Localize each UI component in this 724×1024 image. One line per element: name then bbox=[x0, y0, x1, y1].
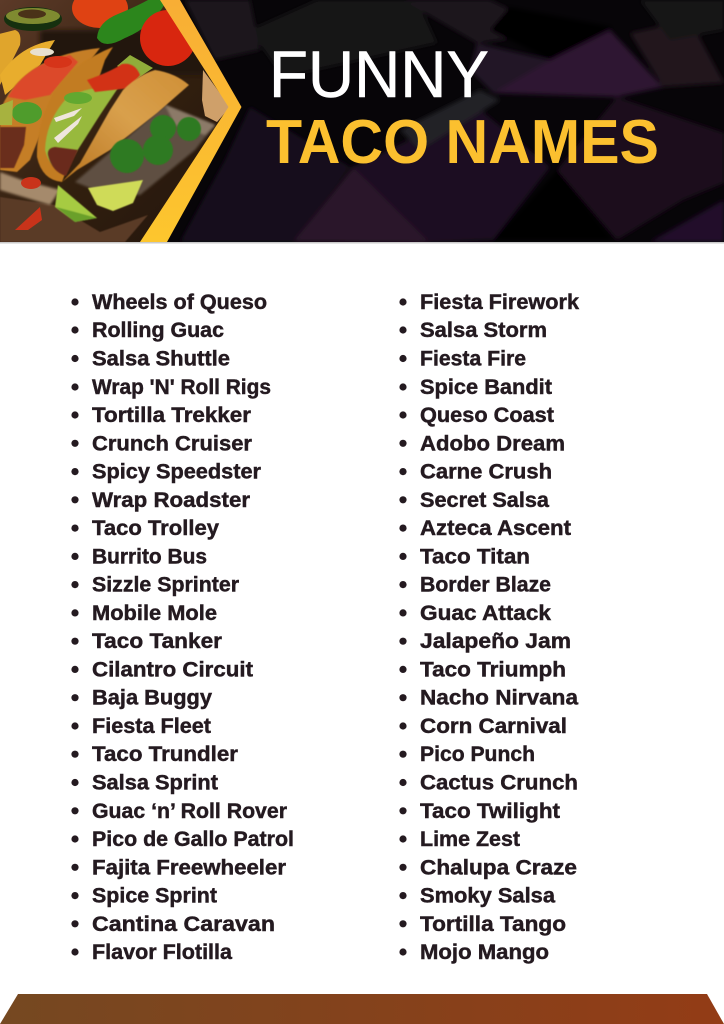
title bbox=[266, 37, 659, 177]
right name list bbox=[399, 291, 579, 964]
item: Fiesta Fleet bbox=[92, 715, 211, 738]
header banner bbox=[0, 0, 724, 243]
item: Lime Zest bbox=[420, 828, 520, 851]
parchment bbox=[75, 105, 215, 195]
item: Baja Buggy bbox=[92, 687, 212, 710]
left name list bbox=[71, 291, 294, 964]
shadow behind food bbox=[40, 30, 230, 75]
title line: FUNNY: FUNNY bbox=[269, 37, 489, 111]
item: Jalapeño Jam bbox=[420, 630, 571, 653]
background: dark purple geometric pattern bbox=[180, 0, 724, 243]
item: Taco Twilight bbox=[420, 800, 560, 823]
item: Smoky Salsa bbox=[420, 885, 555, 908]
item: Guac Attack bbox=[420, 602, 551, 625]
item: Crunch Cruiser bbox=[92, 432, 252, 455]
item: Wrap Roadster bbox=[92, 489, 250, 512]
item: Spice Sprint bbox=[92, 885, 217, 908]
item: Mojo Mango bbox=[420, 941, 549, 964]
item: Rolling Guac bbox=[92, 319, 224, 342]
taco 2 bbox=[37, 47, 113, 182]
item: Taco Triumph bbox=[420, 658, 566, 681]
item: Cactus Crunch bbox=[420, 772, 578, 794]
far left taco bbox=[0, 30, 20, 85]
item: Pico Punch bbox=[420, 743, 535, 766]
item: Adobo Dream bbox=[420, 432, 565, 455]
item: Taco Trolley bbox=[92, 517, 219, 540]
item: Fajita Freewheeler bbox=[92, 856, 286, 879]
item: Salsa Storm bbox=[420, 319, 547, 342]
item: Taco Titan bbox=[420, 545, 530, 568]
item: Spicy Speedster bbox=[92, 461, 261, 484]
item: Cantina Caravan bbox=[92, 913, 275, 936]
lime wedges bbox=[55, 180, 143, 222]
tomatoes and pepper bbox=[72, 0, 128, 28]
item: Taco Tanker bbox=[92, 630, 222, 653]
footer band bbox=[0, 994, 724, 1024]
item: Fiesta Firework bbox=[420, 291, 579, 314]
wooden board bbox=[0, 197, 148, 242]
item: Nacho Nirvana bbox=[420, 687, 578, 710]
item: Queso Coast bbox=[420, 404, 554, 427]
item: Salsa Sprint bbox=[92, 772, 218, 794]
taco shell front bbox=[62, 70, 189, 182]
avocado bbox=[4, 7, 62, 31]
item: Corn Carnival bbox=[420, 715, 567, 738]
item: Pico de Gallo Patrol bbox=[92, 828, 294, 851]
item: Cilantro Circuit bbox=[92, 658, 253, 681]
item: Fiesta Fire bbox=[420, 348, 526, 370]
title line: TACO NAMES: TACO NAMES bbox=[266, 108, 659, 177]
item: Border Blaze bbox=[420, 574, 551, 597]
gold chevron bbox=[140, 0, 242, 242]
item: Flavor Flotilla bbox=[92, 941, 232, 964]
item: Azteca Ascent bbox=[420, 517, 571, 540]
item: Tortilla Trekker bbox=[92, 404, 251, 427]
tomato slices bbox=[15, 207, 42, 230]
item: Mobile Mole bbox=[92, 602, 217, 625]
tortilla wrap behind chevron bbox=[202, 70, 230, 122]
basil leaves bbox=[110, 115, 201, 173]
item: Sizzle Sprinter bbox=[92, 574, 239, 597]
item: Wrap 'N' Roll Rigs bbox=[92, 376, 271, 399]
item: Taco Trundler bbox=[92, 743, 238, 766]
item: Salsa Shuttle bbox=[92, 348, 230, 370]
item: Spice Bandit bbox=[420, 376, 552, 399]
item: Burrito Bus bbox=[92, 545, 207, 568]
item: Wheels of Queso bbox=[92, 291, 267, 314]
item: Chalupa Craze bbox=[420, 856, 577, 879]
item: Tortilla Tango bbox=[420, 913, 566, 936]
item: Carne Crush bbox=[420, 461, 552, 484]
photo: tacos on a wooden board bbox=[0, 0, 240, 242]
item: Guac ‘n’ Roll Rover bbox=[92, 800, 287, 823]
taco 1 bbox=[0, 48, 100, 172]
item: Secret Salsa bbox=[420, 489, 549, 512]
